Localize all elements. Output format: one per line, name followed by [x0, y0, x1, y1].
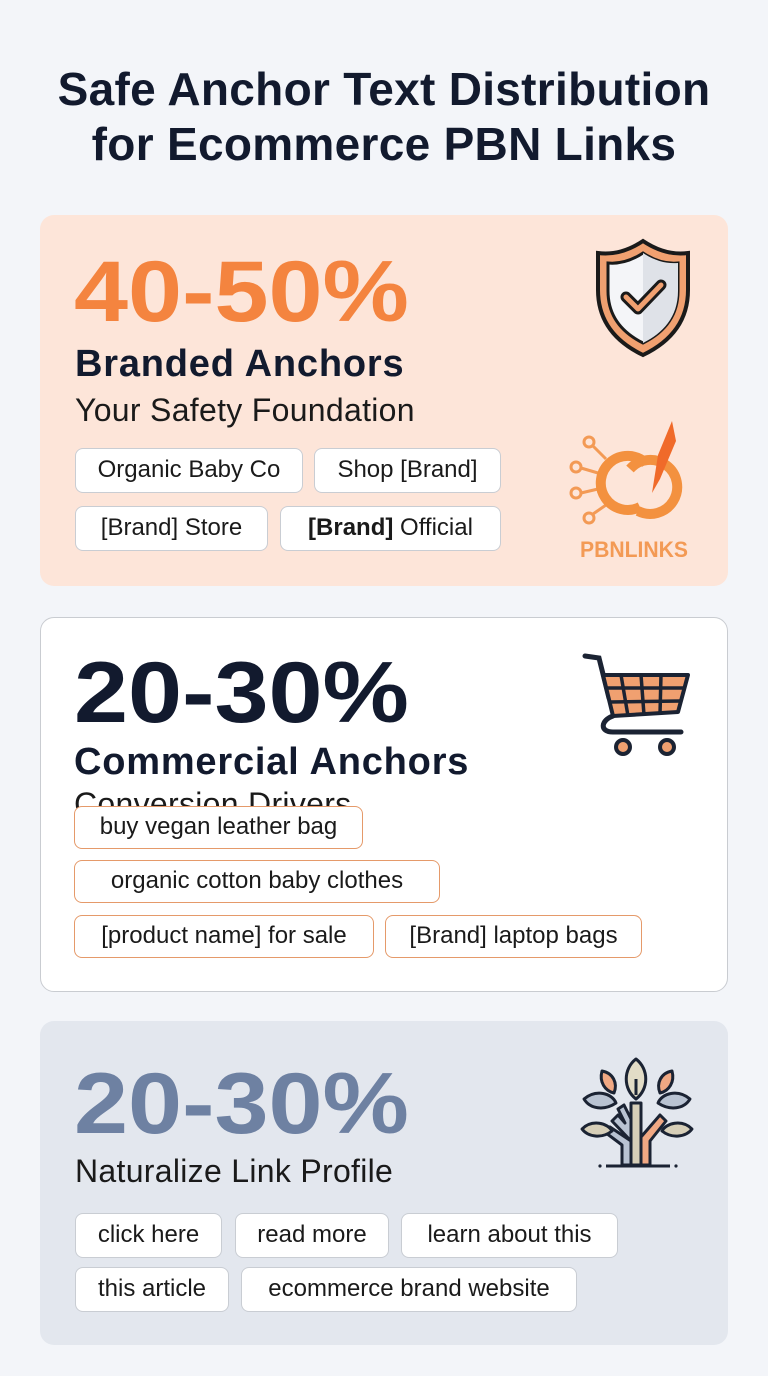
chip: read more — [257, 1221, 367, 1248]
heading: Naturalize Link Profile: Naturalize Link Profile — [75, 1153, 393, 1189]
chip: [Brand] Store — [101, 514, 242, 541]
chip — [314, 448, 501, 493]
heading: Branded Anchors: Branded Anchors — [75, 343, 404, 385]
big percentage 20-30%: 20-30% — [74, 645, 409, 741]
chip: ecommerce brand website — [268, 1275, 550, 1302]
chip — [241, 1267, 577, 1312]
chip: Shop [Brand] — [337, 456, 478, 483]
chip — [75, 1267, 229, 1312]
subtitle (partially hidden): Conversion Drivers — [74, 786, 351, 822]
chip: [Brand] Official — [308, 514, 473, 541]
subtitle: Your Safety Foundation — [75, 392, 415, 428]
icon: PBNLINKS logo — [570, 421, 688, 562]
big percentage 20-30%: 20-30% — [74, 1056, 409, 1152]
chip: this article — [98, 1275, 206, 1302]
chip: click here — [98, 1221, 199, 1248]
chip — [235, 1213, 389, 1258]
panel: branded anchors — [40, 215, 728, 586]
panel: naturalize link profile — [40, 1021, 728, 1345]
chip: organic cotton baby clothes — [111, 867, 403, 894]
chip — [74, 860, 440, 903]
chip — [280, 506, 501, 551]
icon: shopping cart — [582, 654, 690, 756]
chip — [74, 915, 374, 958]
chip: Organic Baby Co — [98, 456, 280, 483]
panel: commercial anchors — [40, 617, 728, 992]
chip — [75, 448, 303, 493]
title: Safe Anchor Text Distribution — [58, 63, 710, 115]
chip: [product name] for sale — [101, 922, 347, 949]
chip — [75, 1213, 222, 1258]
icon: PBNLINKS logo: PBNLINKS — [580, 537, 688, 562]
big percentage 40-50%: 40-50% — [74, 244, 409, 340]
chip — [401, 1213, 618, 1258]
chip: [Brand] laptop bags — [409, 922, 618, 949]
title — [58, 63, 710, 170]
icon: shield — [596, 238, 690, 358]
title: for Ecommerce PBN Links — [92, 118, 676, 170]
icon: tree — [580, 1058, 694, 1168]
chip: buy vegan leather bag — [100, 813, 337, 840]
chip — [74, 806, 363, 849]
chip — [385, 915, 642, 958]
chip — [75, 506, 268, 551]
heading: Commercial Anchors: Commercial Anchors — [74, 741, 469, 783]
chip: learn about this — [427, 1221, 592, 1248]
